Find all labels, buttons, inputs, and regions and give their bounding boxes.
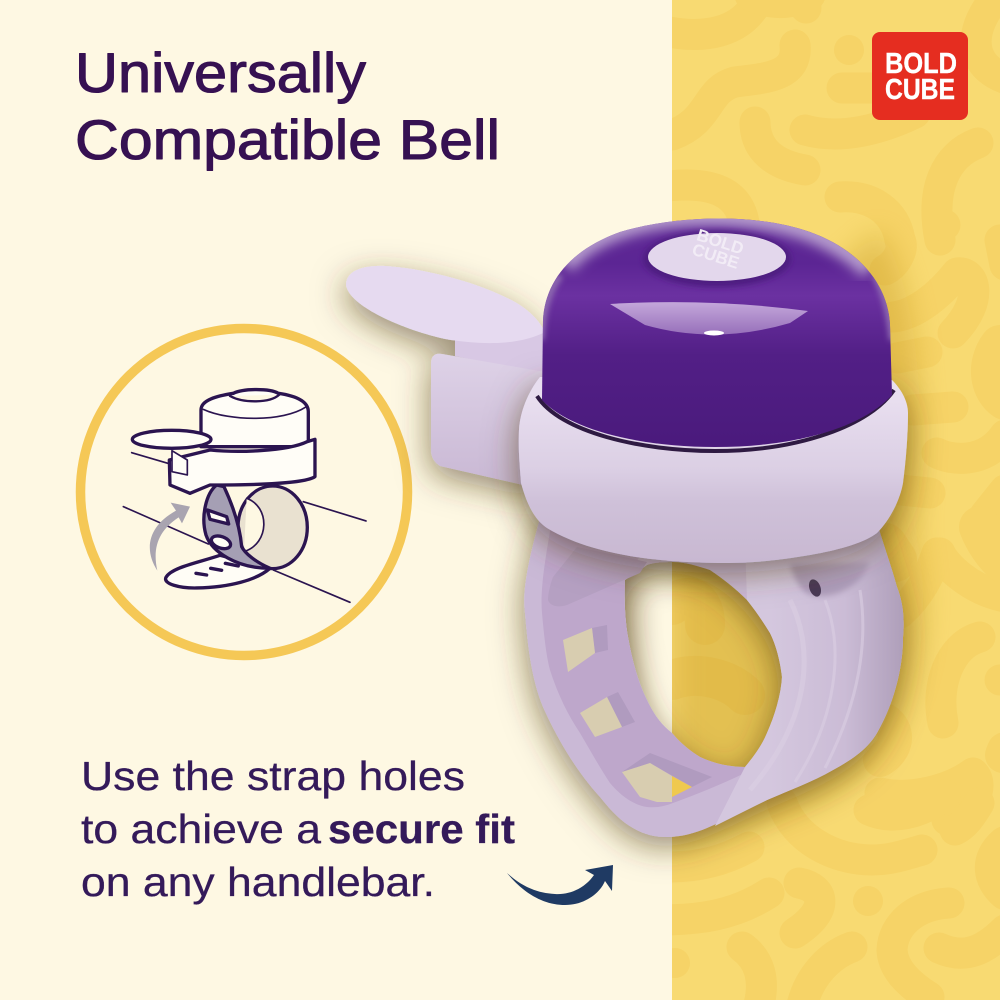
- bell button: CUBE: [690, 240, 741, 273]
- strap loop: [204, 485, 307, 569]
- lever outline: [132, 430, 211, 448]
- strap tail with slots: [166, 555, 270, 588]
- arrow: pointing up-right to the strap: [507, 865, 613, 905]
- dome reflection: [610, 302, 808, 335]
- bell clamp ring: [519, 377, 908, 563]
- thumb lever: [346, 266, 545, 490]
- illustration: how to fit the strap, in a yellow circle: [80, 328, 408, 656]
- strap hole slot: [790, 562, 870, 598]
- bell dome outline: [201, 390, 308, 447]
- background: cream panel: [0, 0, 672, 1000]
- logo: Bold Cube: BOLD: [885, 48, 957, 80]
- shading visible through the strap opening: [625, 560, 672, 733]
- clamp block: [431, 354, 545, 490]
- background: yellow patterned panel: [660, 0, 1000, 1000]
- strap fold band, right side: [715, 500, 904, 826]
- strap adjustment holes: [563, 628, 692, 802]
- body text: [81, 753, 515, 905]
- strap tab: [548, 547, 647, 606]
- title: [75, 41, 500, 171]
- body text: Use the strap holes: [81, 753, 465, 799]
- body text: secure fit: [328, 806, 515, 852]
- soft shadow cast on the yellow panel: [672, 230, 923, 840]
- strap highlight ridges: [750, 590, 863, 790]
- strap hole recess shading: [592, 625, 712, 787]
- bell button: [643, 226, 791, 287]
- bell clamp outline: [169, 439, 315, 493]
- product: bike bell: [346, 216, 908, 837]
- title: Universally: [75, 41, 366, 104]
- bell button: BOLD: [694, 226, 746, 258]
- dome soft rim light: [540, 216, 893, 340]
- logo: Bold Cube: CUBE: [885, 74, 955, 106]
- grey motion arrow: [150, 503, 190, 571]
- title: Compatible Bell: [75, 108, 500, 171]
- silicone strap: [524, 500, 904, 837]
- dome glint: [704, 330, 724, 336]
- handlebar lines: [123, 453, 366, 602]
- logo: Bold Cube: [872, 32, 968, 120]
- dark gap under dome: [537, 390, 894, 451]
- purple dome: [542, 218, 892, 447]
- strap inner surface: [542, 520, 745, 807]
- body text: on any handlebar.: [81, 859, 435, 905]
- body text: to achieve a: [81, 806, 321, 852]
